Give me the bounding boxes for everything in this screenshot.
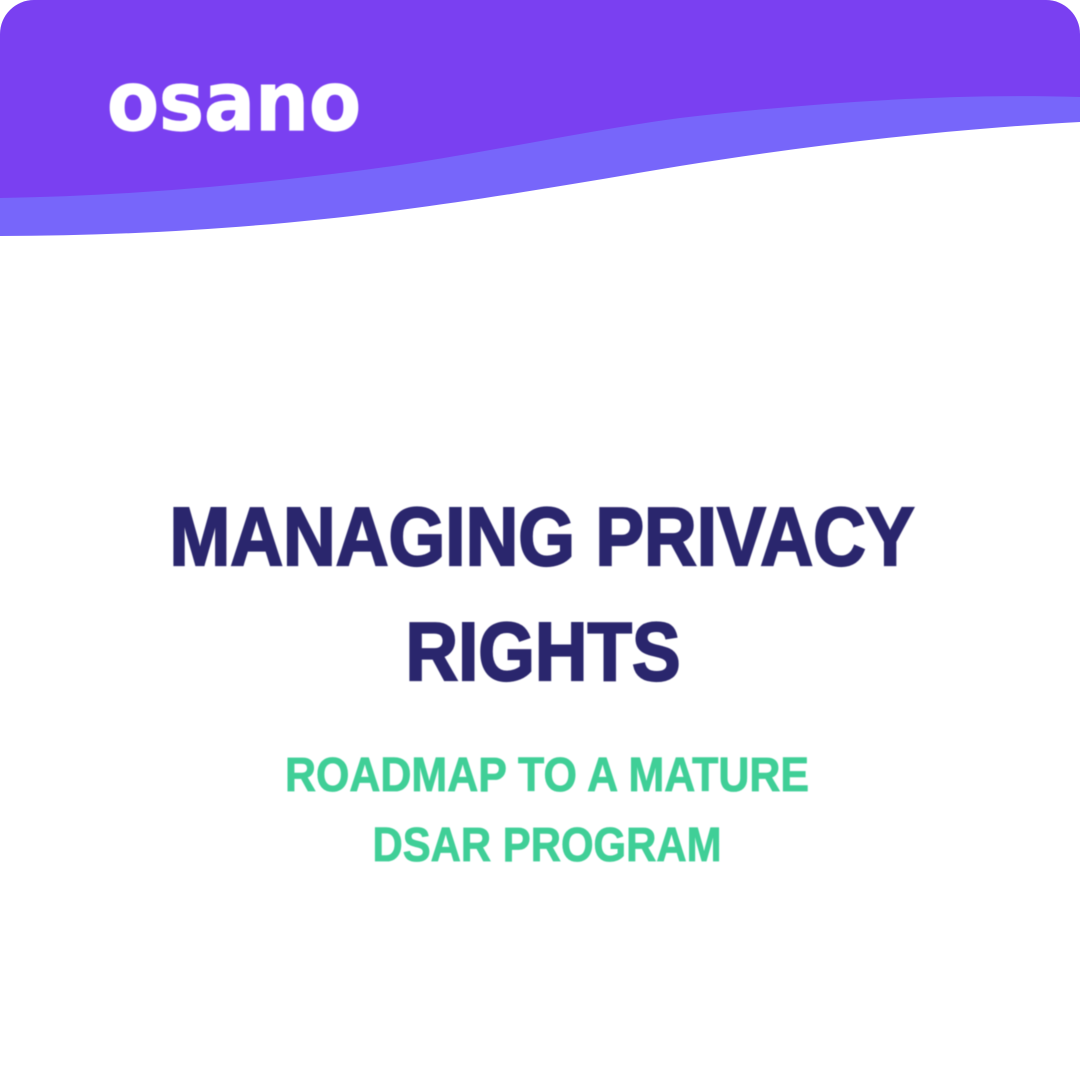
light wave band (0, 96, 1080, 236)
purple wave band (0, 0, 1080, 198)
infographic cover (0, 0, 1080, 863)
subtitle (285, 749, 809, 872)
title (170, 490, 914, 698)
subtitle: DSAR PROGRAM (372, 819, 722, 872)
header wave banner (0, 0, 1080, 236)
title: RIGHTS (406, 605, 680, 698)
title: MANAGING PRIVACY (170, 490, 914, 583)
logo: osano: osano (107, 55, 361, 150)
subtitle: ROADMAP TO A MATURE (285, 749, 809, 802)
